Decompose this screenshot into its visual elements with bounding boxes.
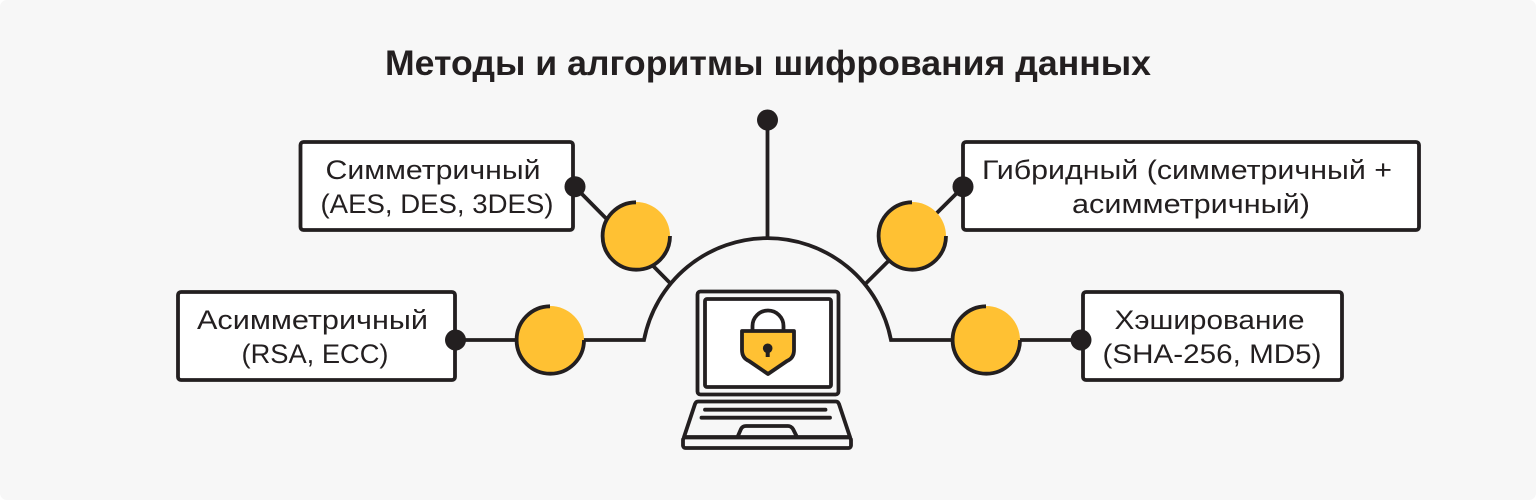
panel: hybrid: асимметричный) xyxy=(1072,189,1310,219)
panel: hybrid xyxy=(963,142,1419,230)
panel: symmetric: Симметричный xyxy=(326,155,540,185)
node: symmetric xyxy=(602,202,670,270)
dot: top xyxy=(757,110,778,130)
dot: hybrid xyxy=(952,176,974,197)
node: asymmetric xyxy=(516,306,584,374)
icon: laptop with padlock xyxy=(683,292,851,448)
panel: asymmetric: (RSA, ECC) xyxy=(242,339,388,369)
panel: hashing: Хэширование xyxy=(1114,305,1304,335)
panel: asymmetric xyxy=(178,292,455,380)
dot: hashing xyxy=(1070,330,1092,350)
panel: symmetric: (AES, DES, 3DES) xyxy=(320,189,554,219)
panel: hashing: (SHA-256, MD5) xyxy=(1102,339,1322,369)
node: hashing xyxy=(952,306,1020,374)
title: Методы и алгоритмы шифрования данных xyxy=(385,44,1152,83)
panel: symmetric xyxy=(300,142,573,230)
panel: hybrid: Гибридный (симметричный + xyxy=(982,155,1392,185)
dot: symmetric xyxy=(564,176,586,197)
dot: asymmetric xyxy=(445,330,466,350)
connector lines xyxy=(455,120,1081,340)
panel: hashing xyxy=(1083,292,1342,380)
panel: asymmetric: Асимметричный xyxy=(197,305,428,335)
node: hybrid xyxy=(878,202,946,270)
